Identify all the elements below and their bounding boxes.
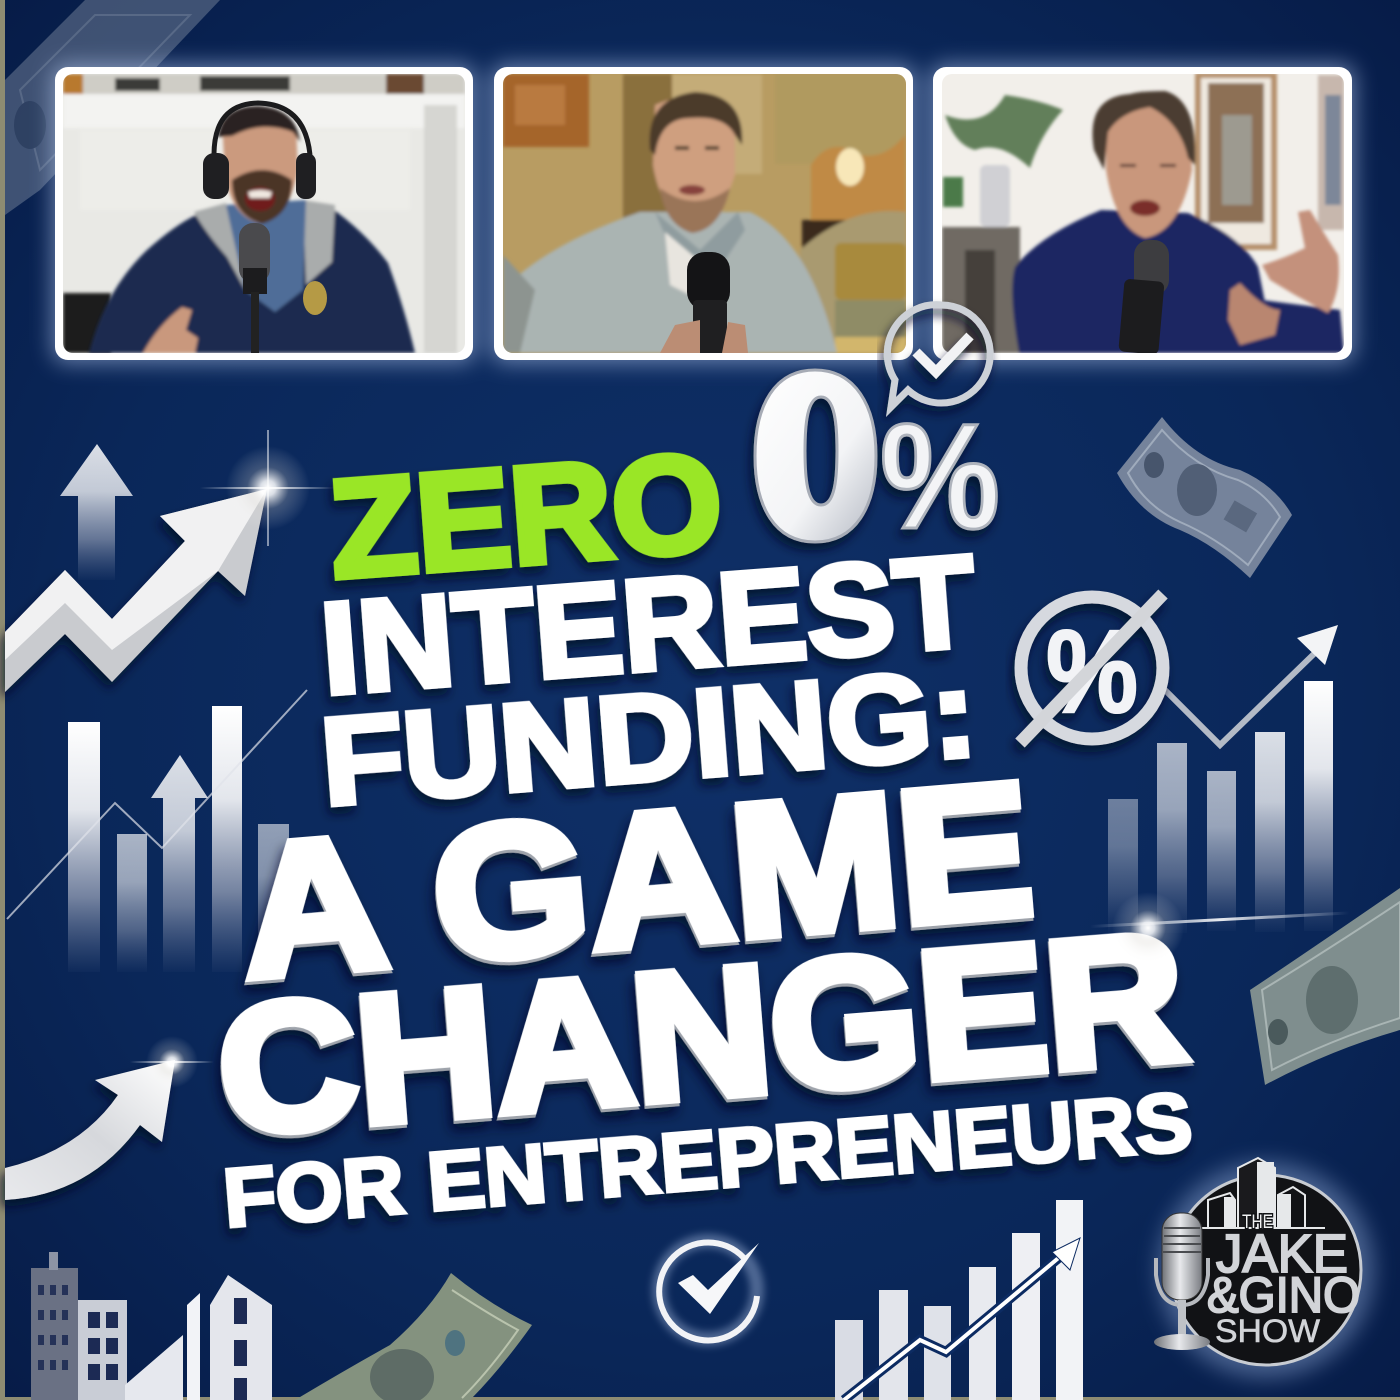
title line: CHANGER: CHANGER [211,894,1192,1173]
logo text: JAKE [1216,1224,1348,1284]
logo text [1207,1212,1360,1349]
microphone [239,223,270,283]
title line: FOR ENTREPRENEURS: FOR ENTREPRENEURS [220,1074,1195,1245]
title line: FUNDING: FUNDING: [316,644,981,832]
video panel: host 2 [494,67,913,360]
title [211,424,1195,1245]
logo skyline [1202,1158,1325,1229]
money bill: top right [1117,417,1292,578]
hands [1262,210,1339,313]
icon: crossed percent: % [1046,606,1138,738]
hoodie [89,207,415,353]
bar chart: left [7,690,307,972]
money bill: bottom [295,1273,532,1400]
logo text: SHOW [1215,1313,1321,1349]
icon: buildings [31,1252,272,1400]
icon: glowing check circle [659,1241,759,1340]
logo text: THE [1242,1212,1273,1233]
money bill: top left [5,0,220,215]
title line: ZERO: ZERO [325,424,727,607]
microphone [1134,240,1169,295]
bar chart: right [1108,625,1338,934]
video panel: host 3 [933,67,1352,360]
shirt [1012,210,1275,353]
big 0% [755,370,1000,560]
face [222,116,298,224]
hand [143,307,198,353]
shelf objects [63,74,465,353]
icon: check speech bubble [887,305,990,407]
title line: A GAME: A GAME [233,743,1040,1018]
video panel: host 1 [55,67,473,360]
logo text: &GINO [1207,1267,1360,1323]
face [1106,106,1192,238]
big 0%: % [880,392,1000,560]
bar chart: bottom [835,1200,1083,1400]
face [651,98,736,202]
microphone [687,252,730,310]
hood grey [194,200,335,290]
frame glows [52,64,1355,363]
icon: up arrow top-left [60,444,133,580]
shirt [503,212,837,353]
title line: INTEREST: INTEREST [316,527,980,722]
icon: rising zigzag arrow left [5,489,267,692]
sparkle lower [130,1036,214,1088]
money bill: right [1250,888,1400,1085]
hair [218,106,300,142]
logo: The Jake & Gino Show [1154,1158,1374,1378]
icon: crossed percent [1020,594,1163,743]
sparkle [200,430,336,546]
lens flare on CHANGER [1090,892,1350,964]
headphones [214,103,310,155]
logo microphone [1154,1213,1210,1350]
icon: lower-left arrow [5,1060,175,1200]
